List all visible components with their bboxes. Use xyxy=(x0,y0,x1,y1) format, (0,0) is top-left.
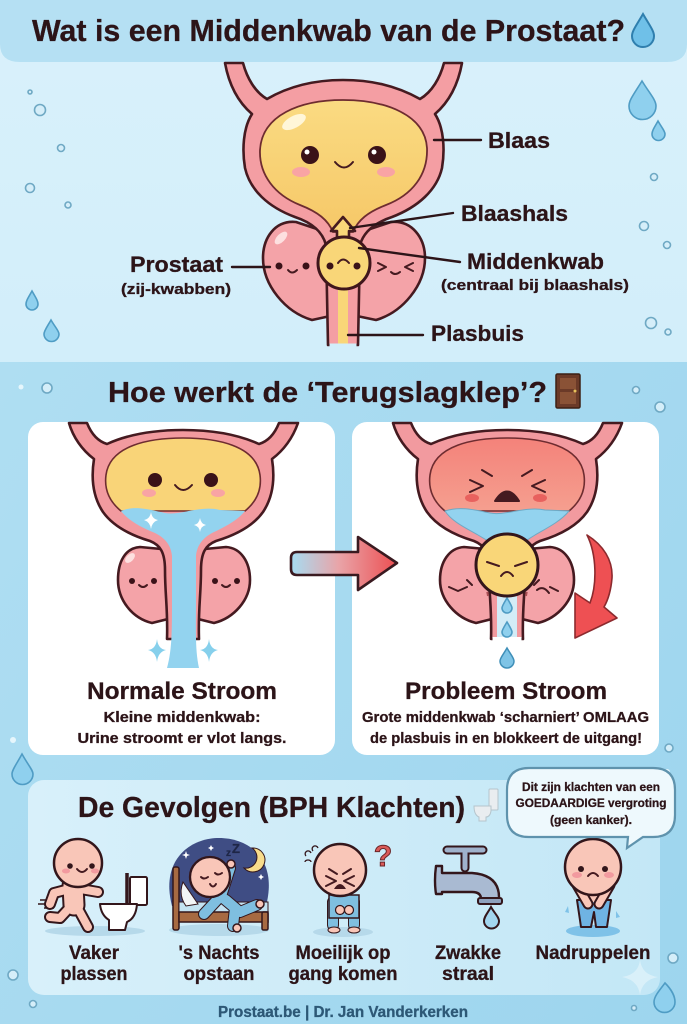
callout: benign note: Dit zijn klachten van een xyxy=(522,780,660,794)
urethra lumen xyxy=(338,282,348,345)
caption xyxy=(78,678,286,747)
right prostate lobe xyxy=(352,222,425,320)
yellow urine xyxy=(106,438,260,511)
arrow: normal to problem xyxy=(291,537,397,590)
left prostate lobe xyxy=(263,222,335,320)
caption: Normale Stroom xyxy=(87,678,277,705)
icon: title water drop xyxy=(632,14,654,47)
right lobe xyxy=(194,547,250,623)
icon: after-dribble xyxy=(565,839,621,937)
panel: consequences xyxy=(28,780,660,995)
icon: dripping tap xyxy=(435,850,502,928)
drops in urethra xyxy=(502,598,512,637)
icon: getting up at night: Z xyxy=(232,841,240,856)
label: Prostaat xyxy=(121,252,231,298)
narrowed urethra lumen xyxy=(497,590,517,637)
symptom labels: Vaker xyxy=(69,943,120,964)
icon: getting up at night: z xyxy=(226,848,231,859)
heading band xyxy=(0,0,687,62)
symptom labels: Moeilijk op xyxy=(296,943,390,964)
heading: consequences: De Gevolgen (BPH Klachten) xyxy=(78,792,465,824)
bladder wall and urethra xyxy=(69,423,298,639)
bladder wall, ureters and urethra xyxy=(225,63,462,345)
lobe and middle lobe faces xyxy=(276,260,413,274)
faces xyxy=(129,473,240,587)
callout: benign note: GOEDAARDIGE vergroting xyxy=(516,796,666,810)
chart: bladder and prostate anatomy xyxy=(225,63,481,347)
label: Prostaat: Prostaat xyxy=(130,252,224,277)
middle lobe arrow xyxy=(331,217,355,241)
label: Blaas: Blaas xyxy=(488,128,550,153)
panel: normal flow xyxy=(28,422,335,755)
caption: Probleem Stroom xyxy=(405,678,607,705)
symptom labels: Nadruppelen xyxy=(536,943,650,964)
caption xyxy=(362,678,649,747)
panel: problem flow xyxy=(352,422,659,755)
label: Plasbuis: Plasbuis xyxy=(431,321,524,346)
label: Middenkwab: (centraal bij blaashals) xyxy=(441,277,629,294)
leader lines xyxy=(232,140,481,335)
label: Blaashals: Blaashals xyxy=(461,201,568,226)
enlarged middle lobe xyxy=(476,534,538,596)
symptom labels: opstaan xyxy=(184,964,254,985)
panel: anatomy section background xyxy=(0,0,687,362)
icon: getting up at night xyxy=(169,838,269,936)
icon: door xyxy=(556,374,580,408)
caption: Kleine middenkwab: xyxy=(104,709,260,726)
icon: hesitant start xyxy=(305,840,392,937)
icon: small toilet xyxy=(474,789,498,821)
icon: hesitant start: ? xyxy=(374,840,392,873)
caption: de plasbuis in en blokkeert de uitgang! xyxy=(370,730,642,747)
urethra open end xyxy=(492,637,522,641)
urine in bladder xyxy=(260,100,427,232)
decorative bubbles, middle section xyxy=(10,383,673,775)
symptom labels: straal xyxy=(442,964,494,985)
label: Prostaat: (zij-kwabben) xyxy=(121,281,231,298)
middle lobe xyxy=(318,237,370,289)
icon: running to toilet xyxy=(38,839,147,936)
faces xyxy=(449,470,558,593)
callout: benign note: (geen kanker). xyxy=(550,813,632,827)
symptom labels: 's Nachts xyxy=(178,943,260,964)
symptom labels xyxy=(60,943,650,985)
label: Middenkwab: Middenkwab xyxy=(467,249,604,274)
bladder face xyxy=(292,146,395,177)
symptom labels: gang komen xyxy=(288,964,398,985)
sparkles xyxy=(148,639,218,662)
blue urine xyxy=(445,509,569,545)
symptom labels: plassen xyxy=(60,964,128,985)
heading: Terugslagklep: Hoe werkt de ‘Terugslagklep’? xyxy=(108,377,547,409)
title: Wat is een Middenkwab van de Prostaat? xyxy=(32,13,625,48)
decorative drops, lower section xyxy=(8,754,678,1012)
red bladder contents xyxy=(430,438,584,511)
bladder wall and urethra xyxy=(393,423,622,639)
urethra open end xyxy=(330,344,356,347)
falling drop xyxy=(500,648,514,668)
left lobe xyxy=(118,547,172,623)
decorative drops and bubbles, top section xyxy=(26,81,671,342)
dashed lobe boundary xyxy=(476,562,538,596)
footer credit: Prostaat.be | Dr. Jan Vanderkerken xyxy=(218,1004,468,1021)
icon: red curved arrow xyxy=(575,535,617,638)
caption: Grote middenkwab ‘scharniert’ OMLAAG xyxy=(362,709,649,726)
right lobe xyxy=(518,547,574,623)
callout: benign note xyxy=(507,768,675,848)
symptom labels: Zwakke xyxy=(435,943,501,964)
left lobe xyxy=(440,547,496,623)
caption: Urine stroomt er vlot langs. xyxy=(78,730,286,747)
blue urine stream xyxy=(121,508,245,668)
label: Middenkwab xyxy=(441,249,629,294)
